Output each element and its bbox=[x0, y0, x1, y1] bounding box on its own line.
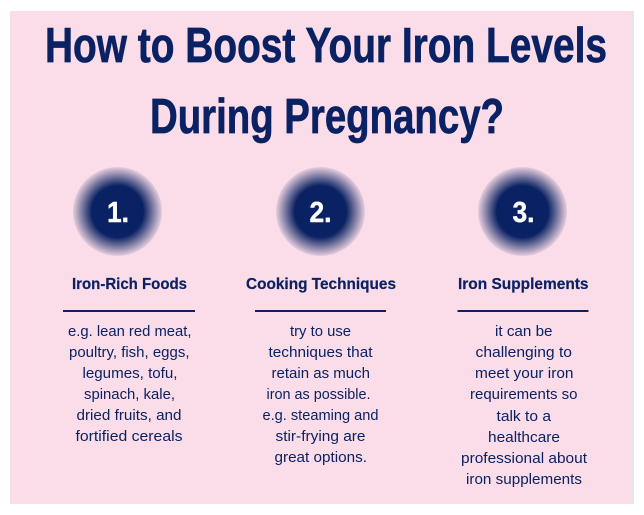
icon: number 1 circle bbox=[73, 167, 162, 256]
heading: iron supplements: Iron Supplements bbox=[458, 276, 589, 293]
text block: iron-rich foods description: legumes, tofu, bbox=[82, 365, 178, 382]
text block: iron supplements description: talk to a bbox=[496, 408, 552, 425]
text block: cooking techniques description: e.g. steaming and bbox=[262, 407, 378, 424]
text block: iron supplements description bbox=[461, 323, 588, 488]
text block: cooking techniques description: stir-frying are bbox=[276, 428, 366, 445]
panel: step 2 cooking techniques bbox=[246, 167, 396, 466]
icon: number 2 circle: 2. bbox=[310, 197, 332, 229]
text block: iron supplements description: meet your iron bbox=[475, 365, 574, 382]
text block: iron supplements description: requirements so bbox=[470, 386, 578, 403]
text block: cooking techniques description: techniques that bbox=[268, 344, 373, 361]
text block: cooking techniques description bbox=[262, 323, 378, 466]
text block: iron supplements description: it can be bbox=[495, 323, 552, 340]
heading: iron-rich foods: Iron-Rich Foods bbox=[72, 276, 187, 293]
icon: number 3 circle: 3. bbox=[512, 197, 534, 229]
text block: iron supplements description: healthcare bbox=[488, 429, 560, 446]
title bbox=[45, 19, 607, 144]
text block: iron-rich foods description bbox=[68, 323, 192, 445]
text block: cooking techniques description: try to use bbox=[290, 323, 351, 340]
heading: cooking techniques: Cooking Techniques bbox=[246, 276, 396, 293]
text block: iron supplements description: challenging to bbox=[476, 344, 572, 361]
text block: cooking techniques description: retain as much bbox=[272, 365, 370, 382]
panel: step 3 iron supplements bbox=[458, 167, 589, 488]
text block: iron supplements description: professional about bbox=[461, 450, 588, 467]
text block: iron supplements description: iron supplements bbox=[466, 471, 582, 488]
text block: iron-rich foods description: poultry, fish, eggs, bbox=[69, 344, 190, 361]
icon: number 3 circle bbox=[478, 167, 567, 256]
icon: number 2 circle bbox=[276, 167, 365, 256]
text block: iron-rich foods description: e.g. lean red meat, bbox=[68, 323, 192, 340]
panel: step 1 iron-rich foods bbox=[63, 167, 195, 445]
text block: iron-rich foods description: spinach, kale, bbox=[84, 386, 175, 403]
text block: cooking techniques description: great options. bbox=[274, 449, 367, 466]
text block: cooking techniques description: iron as possible. bbox=[266, 386, 370, 403]
text block: iron-rich foods description: fortified cereals bbox=[76, 428, 182, 445]
text block: iron-rich foods description: dried fruits, and bbox=[76, 407, 182, 424]
title: During Pregnancy? bbox=[150, 90, 504, 144]
icon: number 1 circle: 1. bbox=[107, 197, 129, 229]
